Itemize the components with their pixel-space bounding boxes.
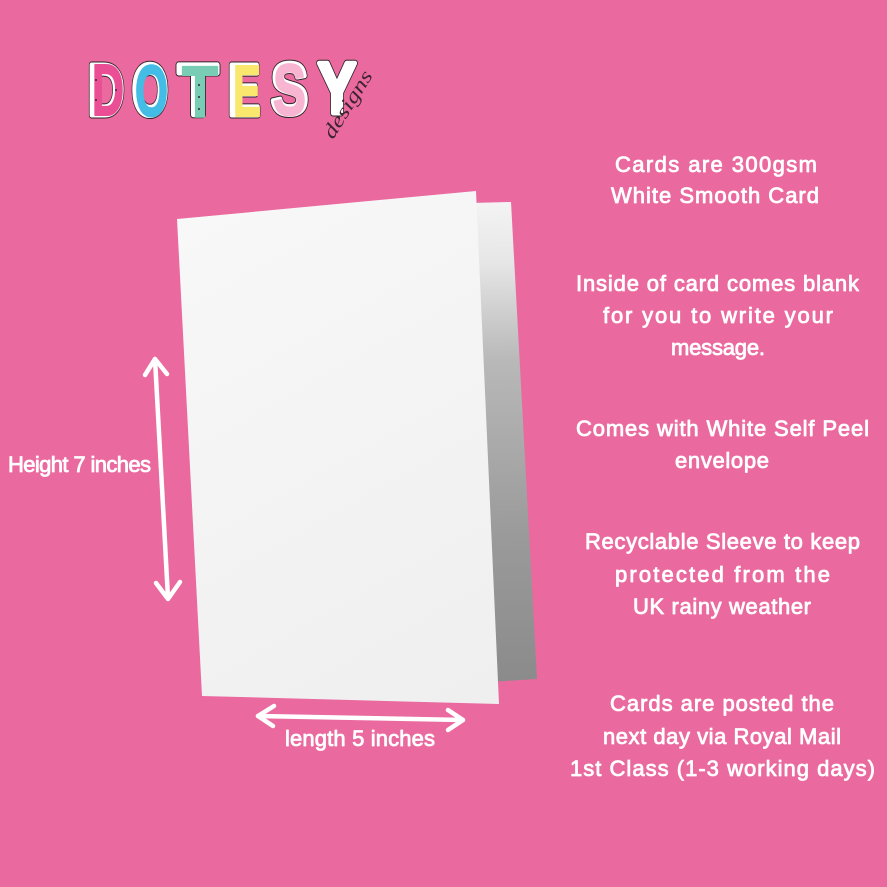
logo letter E: E [233, 52, 261, 132]
text block: sleeve: protected from the [615, 562, 830, 587]
text block: sleeve: Recyclable Sleeve to keep [585, 529, 860, 554]
height arrow [145, 359, 180, 599]
logo letter E: E [228, 51, 260, 131]
logo letter O: O [132, 51, 168, 131]
length arrow [258, 706, 463, 730]
card front panel [177, 191, 499, 704]
logo letter O: O [132, 51, 168, 131]
logo letter E: E [228, 51, 260, 131]
logo script: designs: designs [319, 66, 378, 143]
text block: envelope [576, 416, 869, 473]
text block: card stock [611, 152, 819, 208]
logo letter D: D [88, 51, 124, 131]
logo: Dotesy Designs [88, 49, 378, 143]
text block: inside of card: for you to write your [603, 303, 833, 328]
logo letter T: T [178, 51, 218, 131]
text block: inside of card: message. [671, 335, 765, 360]
logo letter O: O [135, 52, 168, 132]
text block: card stock: White Smooth Card [611, 183, 819, 208]
text block: envelope: Comes with White Self Peel [576, 416, 869, 441]
text block: postage: next day via Royal Mail [603, 724, 841, 749]
text block: postage: 1st Class (1-3 working days) [570, 756, 875, 781]
logo letter D: D [92, 51, 124, 131]
card mockup [177, 191, 537, 704]
length label: length 5 inches [285, 726, 435, 751]
text block: sleeve: UK rainy weather [633, 594, 811, 619]
text block: envelope: envelope [675, 448, 769, 473]
logo letter S: S [271, 50, 308, 130]
text block: postage: Cards are posted the [610, 691, 834, 716]
logo letter Y: Y [318, 49, 356, 129]
logo letter O [132, 51, 168, 132]
text block: inside of card [576, 271, 860, 360]
text block: postage [570, 691, 875, 781]
logo letter D [88, 51, 124, 131]
height label: Height 7 inches [8, 452, 151, 477]
logo letter T: T [182, 53, 218, 133]
logo letter Y: Y [318, 49, 356, 129]
logo letter D: D [88, 51, 124, 131]
text block: sleeve [585, 529, 860, 619]
text block: inside of card: Inside of card comes blank [576, 271, 860, 296]
card back panel [470, 202, 537, 682]
logo letter E [228, 51, 261, 132]
logo letter S: S [273, 51, 306, 131]
text block: card stock: Cards are 300gsm [615, 152, 817, 177]
logo letter T: T [178, 51, 218, 131]
logo letter S: S [271, 50, 308, 130]
